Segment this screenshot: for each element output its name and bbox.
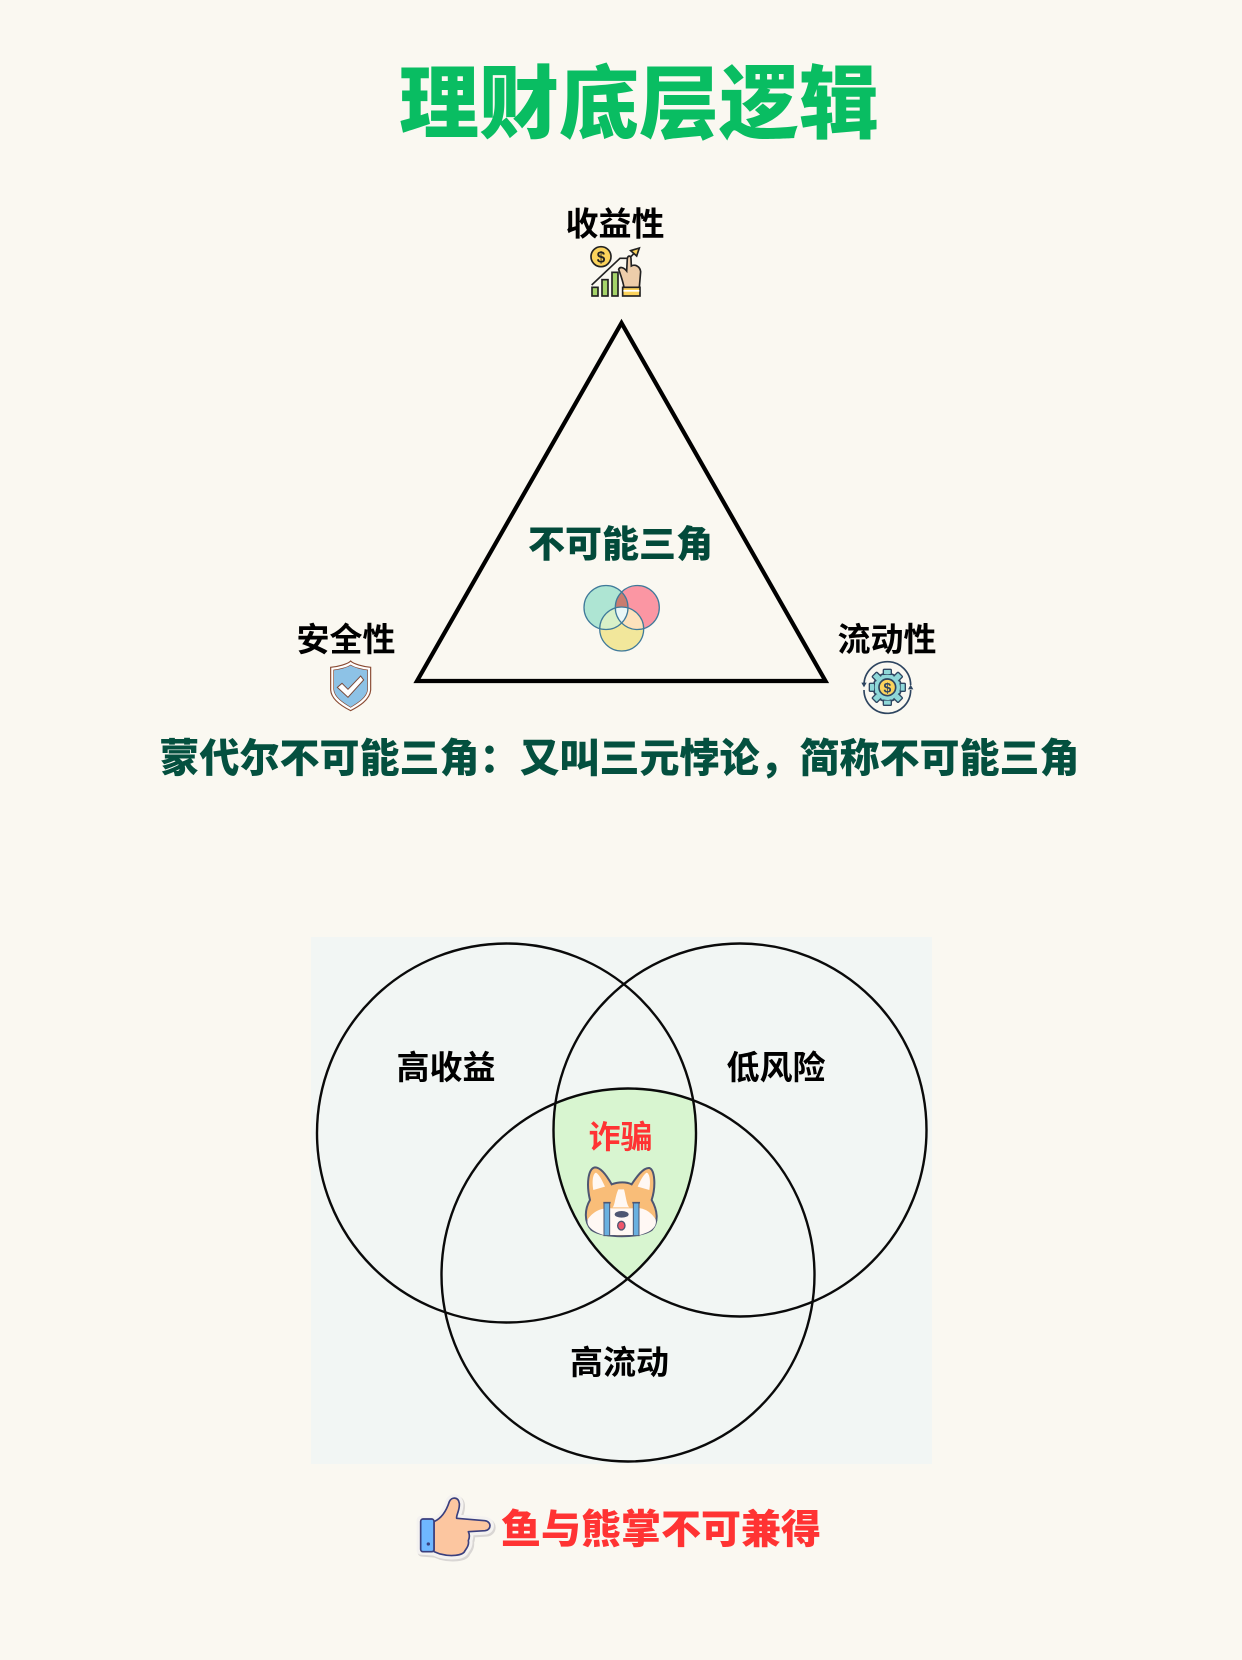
icon: shield with check (331, 661, 371, 711)
triangle heading: 不可能三角 (528, 524, 713, 565)
closing statement: 鱼与熊掌不可兼得 (501, 1508, 821, 1552)
icon: growth chart with pointing hand (591, 247, 641, 296)
venn intersection highlight (554, 1090, 695, 1277)
label: 收益性: 收益性 (566, 206, 664, 242)
venn diagram circles (317, 944, 926, 1462)
title: 理财底层逻辑 (399, 60, 879, 149)
triangle (417, 323, 826, 681)
caption: 蒙代尔不可能三角：又叫三元悖论，简称不可能三角 (160, 737, 1080, 781)
icon: growth chart with pointing hand: $ (597, 249, 606, 266)
icon: pointing hand sticker (421, 1498, 491, 1557)
icon: three overlapping circles (584, 586, 659, 651)
icon: gear with dollar coin (861, 662, 913, 713)
label: 诈骗: 诈骗 (588, 1119, 653, 1155)
label: 高收益: 高收益 (396, 1049, 496, 1086)
label: 高流动: 高流动 (570, 1344, 669, 1381)
icon: gear with dollar coin: $ (883, 680, 891, 696)
label: 低风险: 低风险 (726, 1049, 826, 1086)
label: 流动性: 流动性 (838, 621, 936, 658)
panel: venn background (311, 937, 932, 1464)
label: 安全性: 安全性 (296, 621, 396, 658)
icon: crying corgi (586, 1167, 657, 1236)
